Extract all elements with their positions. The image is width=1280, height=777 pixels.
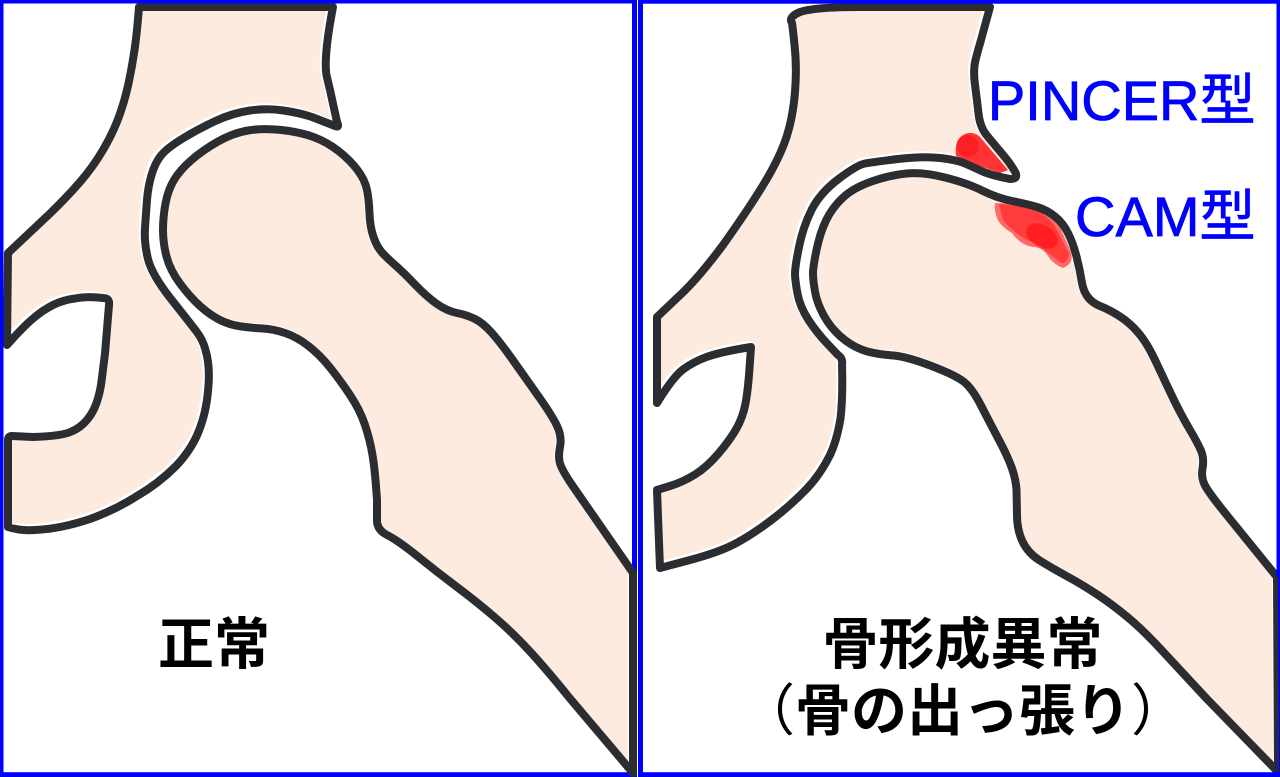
label: cam type: CAM型 bbox=[1075, 185, 1256, 248]
femur tip over frame bbox=[1277, 577, 1278, 772]
abnormal femur bone bbox=[812, 172, 1278, 772]
panel: abnormal hip bbox=[640, 1, 1279, 775]
label: normal: 正常 bbox=[158, 613, 270, 676]
panel frame: abnormal bbox=[640, 1, 1279, 775]
abnormal outlines bbox=[657, 7, 1278, 772]
normal femur outline bbox=[163, 129, 633, 773]
abnormal acetabulum bone bbox=[655, 5, 1016, 568]
panel: normal hip bbox=[1, 1, 634, 775]
label: bone protrusion: （骨の出っ張り） bbox=[739, 680, 1187, 742]
pincer lesion bbox=[956, 133, 1008, 173]
label: bone dysplasia: 骨形成異常 bbox=[822, 613, 1102, 676]
panel frame: normal bbox=[1, 1, 634, 775]
normal acetabulum bone bbox=[5, 5, 338, 530]
label: pincer type: PINCER型 bbox=[988, 69, 1256, 132]
cam lesion bbox=[995, 203, 1072, 268]
normal femur bone bbox=[162, 128, 633, 773]
